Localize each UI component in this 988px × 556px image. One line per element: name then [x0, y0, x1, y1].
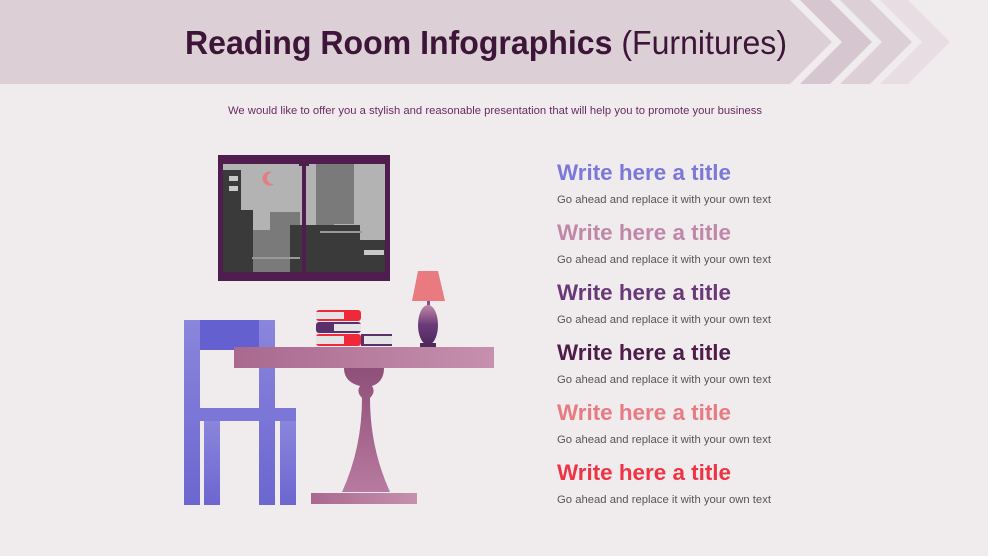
text list: Go ahead and replace it with your own text [557, 194, 771, 206]
text list: Write here a title [557, 280, 731, 305]
books [316, 310, 392, 346]
window [218, 155, 390, 281]
table [234, 347, 494, 504]
header banner [0, 0, 950, 84]
lamp [412, 271, 445, 347]
text list: Go ahead and replace it with your own text [557, 254, 771, 266]
text list: Go ahead and replace it with your own text [557, 314, 771, 326]
text list: Go ahead and replace it with your own text [557, 494, 771, 506]
text list: Write here a title [557, 220, 731, 245]
chair [184, 320, 296, 505]
icon: moon [263, 172, 274, 186]
text list: Go ahead and replace it with your own text [557, 434, 771, 446]
text list: Go ahead and replace it with your own text [557, 374, 771, 386]
text list: Write here a title [557, 160, 731, 185]
title: Reading Room Infographics (Furnitures) [185, 24, 787, 61]
text list: Write here a title [557, 340, 731, 365]
text list [557, 160, 771, 506]
text list: Write here a title [557, 460, 731, 485]
text list: Write here a title [557, 400, 731, 425]
subtitle: We would like to offer you a stylish and reasonable presentation that will help you to promote your business [228, 105, 763, 117]
